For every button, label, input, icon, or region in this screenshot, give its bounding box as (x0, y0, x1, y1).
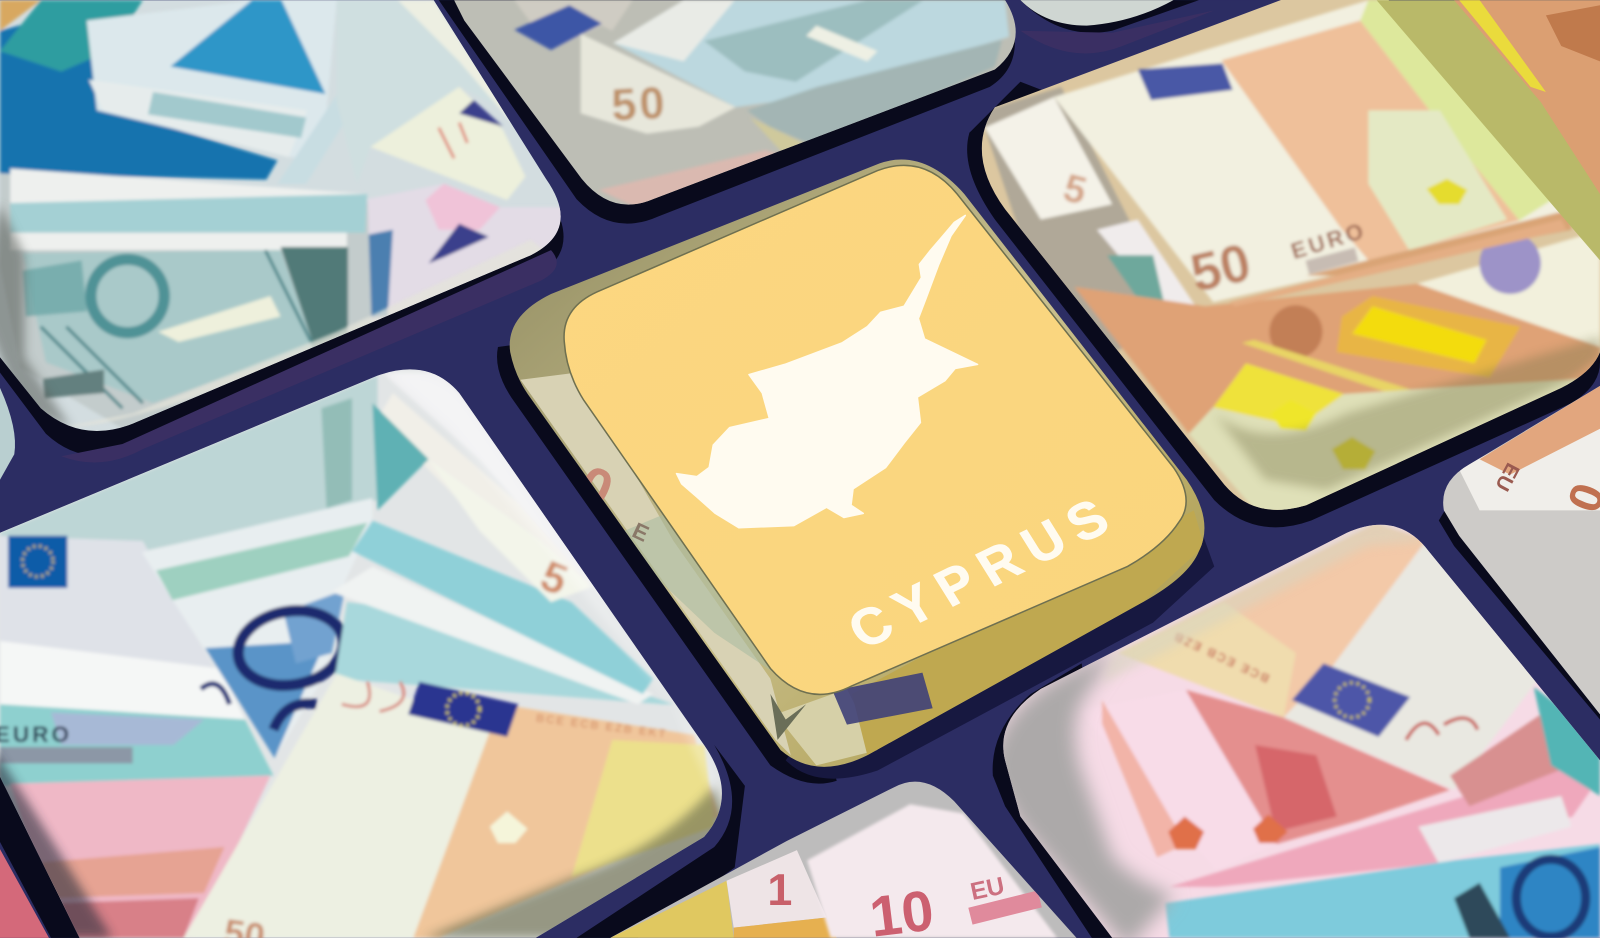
key: bottom-left banknotes: 5 (534, 552, 574, 605)
value and word on note: 50 (1185, 233, 1256, 304)
teal band (0, 704, 273, 786)
key: right euro: EU (1490, 459, 1523, 494)
orange lower note (1074, 284, 1600, 510)
main white 50 euro note (1054, 0, 1600, 302)
pale teal top note (0, 376, 378, 551)
left bevel and lower left note (985, 86, 1136, 352)
left bevel shading (990, 648, 1173, 938)
note value on top-middle key: 50 (610, 77, 669, 131)
key: bottom-center banknotes: EU (968, 873, 1007, 906)
bevel reflections: E (628, 518, 653, 547)
key: bottom-right banknotes (990, 510, 1600, 938)
key: bottom-center banknotes: 1 (767, 864, 792, 915)
white left note (6, 537, 148, 590)
key: far bottom-left red sliver (0, 849, 49, 938)
key: right euro (1443, 386, 1600, 714)
key: bottom-center banknotes (610, 776, 1080, 938)
purple glow under keys (61, 10, 1214, 462)
label CYPRUS: CYPRUS (838, 488, 1119, 660)
key: top-right 50 euro banknotes: EURO (1288, 218, 1369, 264)
lower green banknote (0, 174, 372, 429)
bevel of center key (510, 160, 1204, 767)
lower shadow band (1214, 337, 1600, 490)
key: far-left sliver (0, 388, 15, 480)
bottom grey shadow (423, 786, 735, 938)
key shading (0, 204, 71, 429)
pink note (10, 776, 270, 938)
yellow ribbon and block (1242, 338, 1409, 392)
key: top-left banknotes (0, 0, 582, 439)
key: bottom-left banknotes: BCE ECB EZB EKT (535, 713, 668, 741)
blue banknote (0, 23, 280, 182)
key: top-middle banknotes (449, 0, 1031, 220)
key: tiny top (1020, 0, 1173, 26)
pink corner (367, 184, 571, 334)
bevel reflections (520, 373, 1204, 765)
key: bottom-left banknotes (0, 367, 740, 938)
EU flag left (8, 536, 67, 588)
key: Cyprus gold center key (510, 160, 1204, 767)
key: top-right 50 euro banknotes (959, 0, 1600, 521)
key: top-right 50 euro banknotes: 5 (1059, 166, 1091, 213)
blue 20 note (142, 498, 372, 758)
map of Cyprus (677, 215, 978, 528)
key face (564, 165, 1186, 694)
50 euro cream note (184, 674, 500, 938)
key: far top-right (1367, 0, 1600, 265)
bevel reflections: 0 (568, 453, 622, 522)
key: bottom-right banknotes: BCE ECB EZB (1170, 628, 1272, 686)
folded notes (335, 602, 673, 704)
